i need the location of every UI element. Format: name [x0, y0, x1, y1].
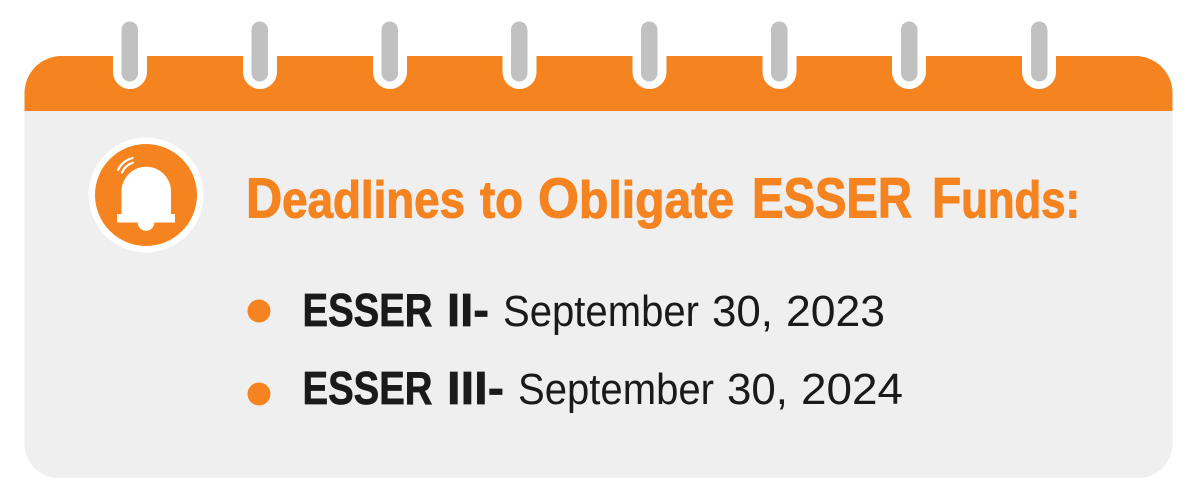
- heading: Obligate: [538, 166, 734, 230]
- text: ESSER III deadline: III-: [447, 362, 504, 414]
- text: ESSER III deadline: [302, 362, 903, 414]
- heading: Deadlines: [246, 166, 465, 230]
- heading: Funds:: [932, 166, 1080, 230]
- text: ESSER III deadline: 2024: [801, 365, 903, 414]
- bullet: ESSER III: [248, 382, 270, 406]
- text: ESSER II deadline: 30,: [712, 287, 773, 336]
- heading: [246, 166, 1080, 230]
- calendar binding rings: [113, 22, 1056, 89]
- heading: ESSER: [752, 166, 912, 230]
- text: ESSER II deadline: II-: [447, 284, 489, 336]
- text: ESSER III deadline: 30,: [727, 365, 788, 414]
- panel: calendar body: [24, 111, 1172, 478]
- text: ESSER III deadline: ESSER: [302, 362, 432, 414]
- text: ESSER III deadline: September: [518, 365, 714, 414]
- heading: to: [480, 172, 523, 230]
- bullet: ESSER II: [248, 300, 270, 322]
- text: ESSER II deadline: September: [503, 287, 699, 336]
- panel: orange calendar header: [24, 56, 1172, 111]
- icon: alarm bell: [88, 138, 204, 252]
- text: ESSER II deadline: ESSER: [302, 284, 432, 336]
- text: ESSER II deadline: [302, 284, 885, 336]
- text: ESSER II deadline: 2023: [786, 287, 885, 336]
